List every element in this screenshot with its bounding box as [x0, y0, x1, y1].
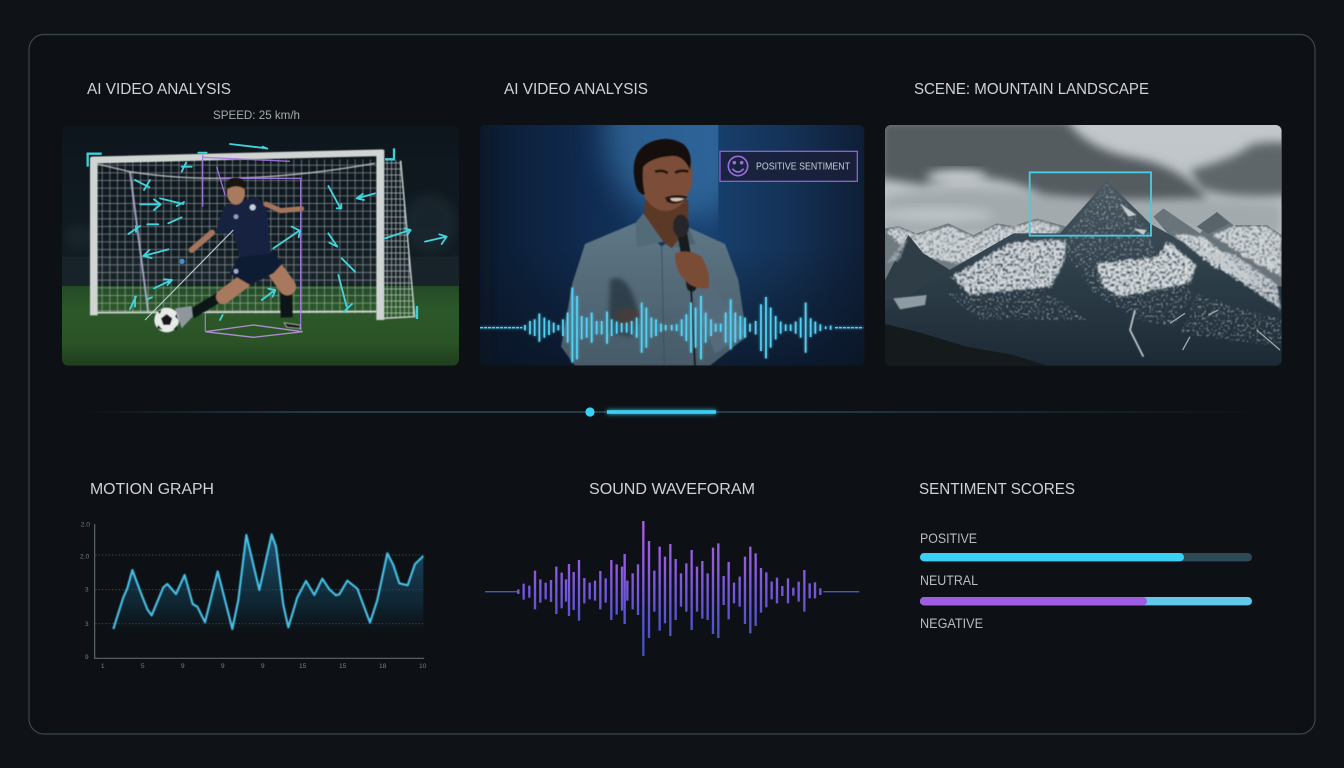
- heading: sentiment scores: SENTIMENT SCORES: [919, 481, 1075, 498]
- heading: sound waveform: SOUND WAVEFORAM: [589, 481, 755, 498]
- panel: football video frame: [62, 126, 459, 366]
- positive bar: [920, 553, 1252, 561]
- detection box: [1030, 172, 1151, 236]
- badge label: POSITIVE SENTIMENT: [756, 162, 850, 173]
- positive label: POSITIVE: [920, 531, 977, 546]
- panel: mountain video frame: [880, 120, 1290, 367]
- waveform baseline: [485, 590, 859, 594]
- x axis labels: 5: [141, 663, 145, 670]
- timeline: [85, 407, 1260, 417]
- sound waveform chart: [485, 521, 859, 656]
- neutral bar: [920, 597, 1252, 605]
- x axis labels: 9: [221, 663, 225, 670]
- x axis labels: 10: [419, 663, 427, 670]
- x axis labels: [101, 663, 427, 670]
- snow fields: [893, 233, 1282, 310]
- y axis labels: 9: [85, 654, 89, 661]
- goal net: [93, 159, 415, 318]
- neutral label: NEUTRAL: [920, 573, 978, 588]
- ball: [154, 308, 179, 332]
- sentiment badge: [720, 151, 857, 181]
- icon: smiley: [728, 156, 748, 176]
- heading: AI video analysis center: AI VIDEO ANALYSIS: [504, 81, 648, 98]
- y axis labels: 3: [85, 587, 89, 594]
- foreground hill: [885, 324, 1047, 366]
- speaker: [561, 139, 747, 366]
- y axis labels: 3: [85, 621, 89, 628]
- main mountain base: [885, 181, 1282, 366]
- speech waveform: [480, 288, 863, 362]
- panel: speaker video frame: [480, 125, 864, 366]
- heading: motion graph: MOTION GRAPH: [90, 481, 214, 498]
- x axis labels: 9: [261, 663, 265, 670]
- rock flecks: [947, 183, 1282, 347]
- snow on peak: [1120, 203, 1147, 235]
- motion arrows: [128, 144, 447, 320]
- x axis labels: 15: [339, 663, 347, 670]
- heading: AI video analysis left: AI VIDEO ANALYSIS: [87, 81, 231, 98]
- waveform bars: [518, 521, 820, 656]
- clouds: [880, 120, 1290, 233]
- chart axes: [95, 524, 424, 658]
- chart area: [113, 534, 423, 635]
- negative label: NEGATIVE: [920, 616, 983, 631]
- x axis labels: 1: [101, 663, 105, 670]
- heading: scene mountain landscape: SCENE: MOUNTAIN LANDSCAPE: [914, 81, 1149, 98]
- corner markers: [88, 148, 417, 319]
- player: [175, 178, 302, 329]
- timeline marker: [585, 407, 595, 417]
- trajectory line: [145, 230, 233, 320]
- timeline progress: [607, 410, 716, 414]
- x axis labels: 9: [181, 663, 185, 670]
- purple tracking box: [203, 155, 303, 337]
- line chart: motion graph: [80, 521, 427, 670]
- y axis labels: [80, 521, 90, 661]
- y axis labels: 2.0: [80, 553, 90, 560]
- x axis labels: 15: [299, 663, 307, 670]
- chart line: [113, 534, 423, 629]
- chart grid: [95, 555, 423, 624]
- speed label: SPEED: 25 km/h: [213, 108, 300, 122]
- sentiment scores: [920, 531, 1252, 631]
- goal frame: [90, 149, 384, 320]
- x axis labels: 18: [379, 663, 387, 670]
- far mountain range: [885, 208, 1282, 300]
- y axis labels: 2.0: [81, 521, 90, 528]
